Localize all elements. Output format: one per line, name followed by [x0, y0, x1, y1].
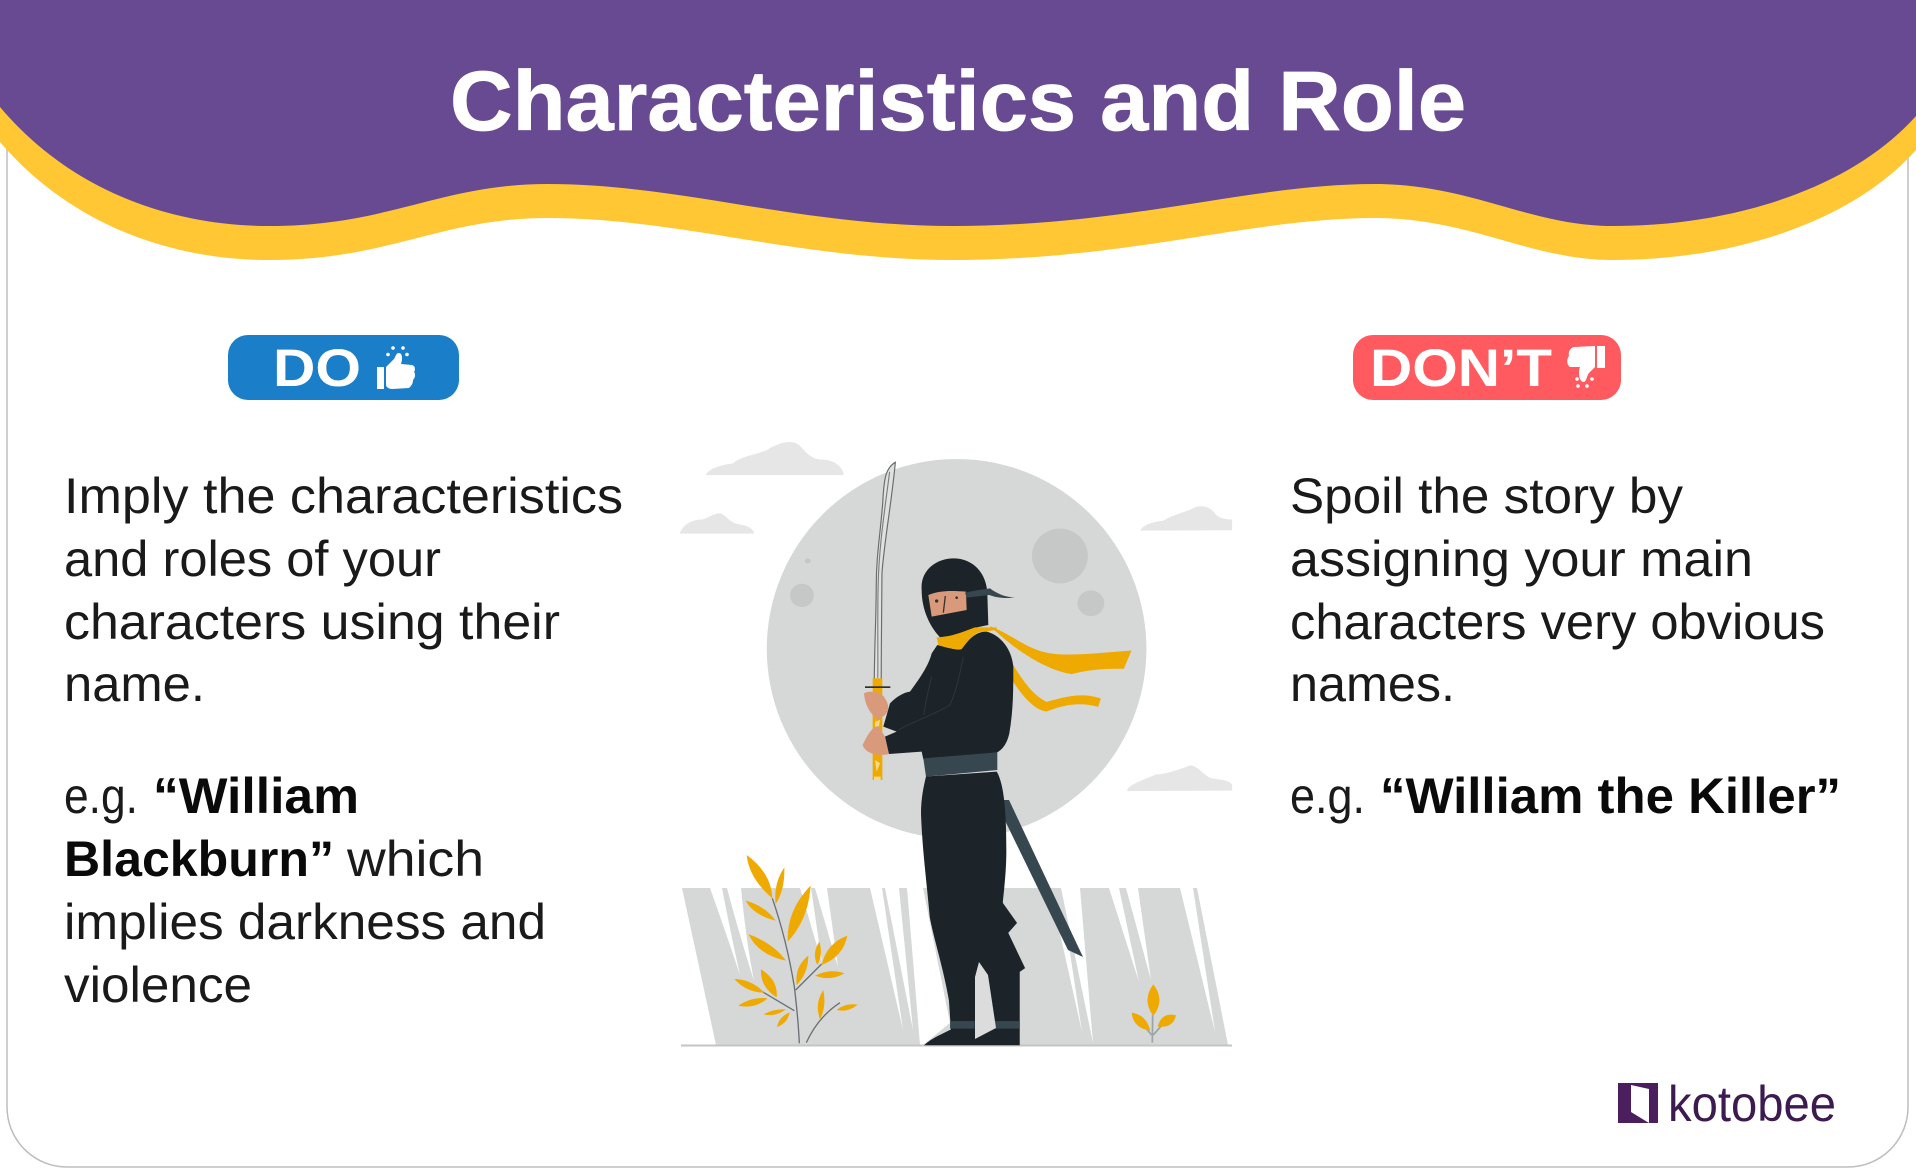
- right small plant: [1132, 984, 1176, 1043]
- yellow wave: [0, 0, 1916, 260]
- clothing creases: [898, 657, 963, 730]
- do description: [64, 468, 623, 712]
- scabbard: [995, 800, 1083, 957]
- upper body: [863, 558, 1015, 780]
- kotobee logo: [1618, 1076, 1836, 1132]
- do description: Imply the characteristics: [64, 468, 623, 524]
- DON'T badge: [1353, 335, 1621, 400]
- face: [928, 591, 967, 617]
- do example: “William: [153, 768, 359, 824]
- clouds: [680, 442, 1232, 791]
- title: Characteristics and Role: [450, 54, 1466, 148]
- DO badge: DO: [273, 339, 361, 398]
- sword handle: [873, 678, 882, 780]
- hood: [922, 558, 988, 637]
- header band: [0, 0, 1916, 260]
- logo wordmark: kotobee: [1668, 1076, 1836, 1132]
- don't description: [1290, 468, 1825, 712]
- do example: e.g.: [64, 768, 138, 824]
- right text column: don't: [1290, 468, 1841, 824]
- do example: violence: [64, 957, 252, 1013]
- purple wave: [0, 0, 1916, 226]
- left text column: do: [64, 468, 623, 1013]
- ninja figure: [863, 462, 1131, 1045]
- do description: name.: [64, 656, 205, 712]
- headband: [965, 588, 1015, 598]
- torso and arms: [883, 632, 1013, 759]
- eyes and nose: [935, 596, 958, 613]
- leg gap: [975, 962, 996, 1039]
- grass field: [681, 888, 1232, 1046]
- handle marks: [874, 720, 881, 780]
- don't description: names.: [1290, 656, 1455, 712]
- don't description: Spoil the story by: [1290, 468, 1683, 524]
- scarf tails: [989, 626, 1131, 711]
- do description: and roles of your: [64, 531, 441, 587]
- ankle bands: [950, 1021, 1020, 1029]
- do example: implies darkness and: [64, 894, 546, 950]
- do example: Blackburn”: [64, 831, 334, 887]
- don't description: characters very obvious: [1290, 594, 1825, 650]
- sword guard: [865, 686, 890, 688]
- do example: which: [346, 831, 484, 887]
- icon: thumbs up: [377, 346, 415, 389]
- scarf front: [937, 627, 997, 649]
- do description: characters using their: [64, 594, 560, 650]
- ninja illustration: [680, 442, 1232, 1046]
- do example: [64, 768, 546, 1013]
- left plant: [734, 855, 858, 1043]
- icon: thumbs down: [1567, 346, 1605, 388]
- legs: [921, 772, 1025, 1045]
- sword blade: [874, 462, 895, 679]
- DON'T badge: DON’T: [1370, 339, 1552, 398]
- DO badge: [228, 335, 459, 400]
- moon: [767, 459, 1146, 839]
- logo mark: [1618, 1083, 1658, 1123]
- don't example: “William the Killer”: [1380, 768, 1841, 824]
- hands: [863, 692, 889, 755]
- don't description: assigning your main: [1290, 531, 1753, 587]
- belt: [923, 752, 997, 777]
- don't example: e.g.: [1290, 768, 1365, 824]
